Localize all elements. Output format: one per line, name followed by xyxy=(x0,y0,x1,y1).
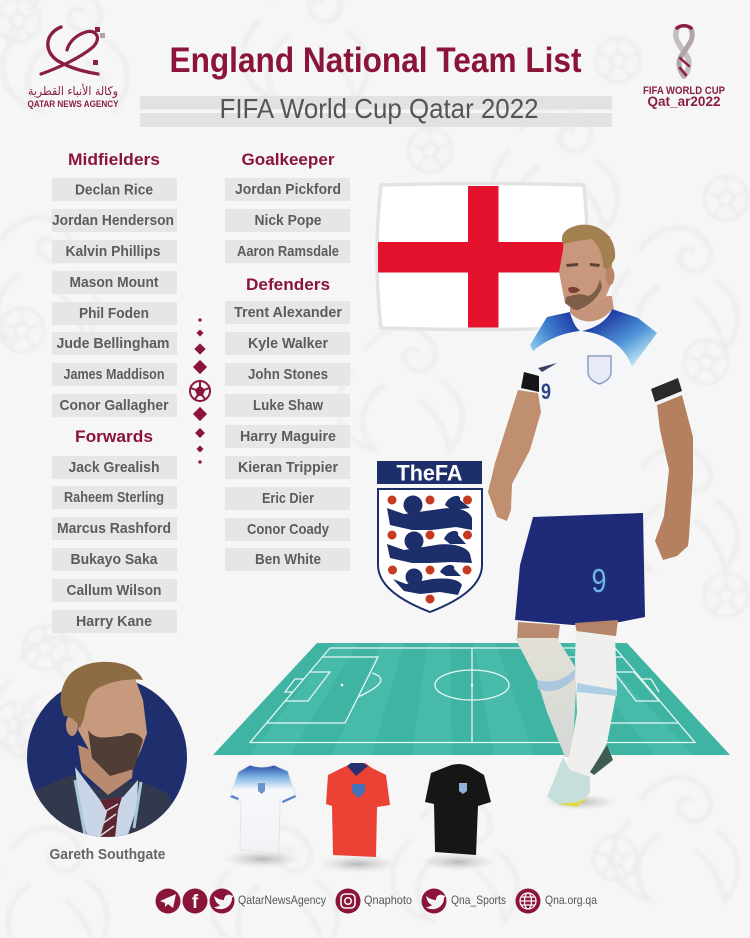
player: Harry Kane: Harry Kane xyxy=(76,613,152,630)
handle: Qna.org.qa: Qna.org.qa xyxy=(545,893,597,907)
icon: globe xyxy=(516,888,540,914)
heading: Defenders: Defenders xyxy=(246,275,330,294)
player: Phil Foden: Phil Foden xyxy=(79,305,149,322)
player: Bukayo Saka xyxy=(52,548,177,571)
player: Kalvin Phillips xyxy=(52,240,177,263)
neck xyxy=(570,296,614,332)
head and hair xyxy=(559,225,615,311)
face xyxy=(78,678,147,775)
logo: Qatar News Agency xyxy=(28,27,119,110)
handle: QatarNewsAgency: QatarNewsAgency xyxy=(238,893,326,907)
hair xyxy=(61,662,143,728)
coach name: Gareth Southgate xyxy=(50,846,166,863)
boot sole xyxy=(557,798,588,807)
right sock xyxy=(567,631,617,777)
icon: twitter xyxy=(422,888,446,914)
pitch xyxy=(213,643,730,755)
Qatar2022 wordmark: Qat_ar2022 xyxy=(648,94,720,109)
front boot xyxy=(547,757,590,807)
coach photo: Gareth Southgate xyxy=(20,662,190,838)
player: Marcus Rashford: Marcus Rashford xyxy=(57,520,171,537)
player: Kyle Walker xyxy=(225,332,350,355)
title: England National Team List xyxy=(170,41,582,80)
handle: Qna_Sports: Qna_Sports xyxy=(451,893,506,907)
panel: goalkeepers and defenders list xyxy=(225,150,350,571)
player: Callum Wilson xyxy=(52,579,177,602)
player: Jordan Henderson: Jordan Henderson xyxy=(52,212,174,229)
shirt crest xyxy=(588,356,611,384)
icon: twitter xyxy=(210,888,234,914)
panel: midfielders and forwards list xyxy=(52,150,177,633)
player: Kalvin Phillips: Kalvin Phillips xyxy=(66,243,160,260)
ear xyxy=(66,714,78,736)
shorts number: 9 xyxy=(592,562,606,599)
kit: home white shirt xyxy=(222,765,302,868)
player: Kieran Trippier xyxy=(225,456,350,479)
left sock xyxy=(515,638,577,757)
heading: Midfielders: Midfielders xyxy=(68,150,160,169)
captain armband xyxy=(651,378,682,402)
three lions xyxy=(387,496,472,595)
suit and shirt xyxy=(34,767,172,837)
navy circle xyxy=(27,677,187,837)
icon: England flag xyxy=(377,184,588,330)
right sock band xyxy=(577,683,617,696)
icon: QNA swirl xyxy=(41,27,105,74)
FA banner xyxy=(377,460,482,486)
icon: facebook xyxy=(182,888,208,914)
icon: instagram xyxy=(336,888,360,914)
player: Mason Mount: Mason Mount xyxy=(70,274,158,291)
icon: diamond and football divider xyxy=(190,318,210,464)
icon: The FA crest xyxy=(377,460,482,612)
icon: FIFA emblem xyxy=(676,26,692,76)
player: Callum Wilson: Callum Wilson xyxy=(66,582,162,599)
player: Aaron Ramsdale xyxy=(225,240,350,263)
icon: facebook: f xyxy=(192,892,199,913)
player: Trent Alexander xyxy=(225,301,350,324)
player: Conor Gallagher xyxy=(52,394,177,417)
back boot xyxy=(590,745,613,775)
subtitle: FIFA World Cup Qatar 2022 xyxy=(220,93,538,124)
QNA english name: QATAR NEWS AGENCY xyxy=(28,99,119,110)
player: Eric Dier xyxy=(225,487,350,510)
player: Kyle Walker: Kyle Walker xyxy=(248,335,328,352)
right blue shoulder xyxy=(582,309,657,367)
player: Declan Rice: Declan Rice xyxy=(75,182,153,198)
FA banner: TheFA xyxy=(396,460,463,486)
player: James Maddison: James Maddison xyxy=(64,366,164,383)
heading: Goalkeeper: Goalkeeper xyxy=(242,150,335,169)
player: Conor Coady xyxy=(225,518,350,541)
QNA arabic name: وكالة الأنباء القطرية xyxy=(28,83,118,99)
player: Mason Mount xyxy=(52,271,177,294)
player: Marcus Rashford xyxy=(52,517,177,540)
left sock band xyxy=(537,668,576,691)
handle: Qnaphoto: Qnaphoto xyxy=(364,893,412,907)
player: John Stones xyxy=(225,363,350,386)
player: Eric Dier: Eric Dier xyxy=(262,490,314,507)
player: Jack Grealish: Jack Grealish xyxy=(68,459,160,476)
player: Nick Pope xyxy=(225,209,350,232)
heading: Forwards: Forwards xyxy=(75,427,153,446)
player: Raheem Sterling xyxy=(52,486,177,509)
player: Ben White xyxy=(225,548,350,571)
player: John Stones: John Stones xyxy=(248,366,328,383)
player photo: Harry Kane xyxy=(488,225,693,810)
player: Jordan Pickford xyxy=(225,178,350,201)
black armband xyxy=(521,372,539,392)
roses xyxy=(388,496,472,604)
Nike swoosh xyxy=(538,363,557,372)
player: Bukayo Saka: Bukayo Saka xyxy=(70,551,158,568)
left arm xyxy=(488,390,541,521)
player: Phil Foden xyxy=(52,302,177,325)
player: Jordan Pickford: Jordan Pickford xyxy=(235,181,341,198)
kit: black goalkeeper shirt xyxy=(420,764,496,871)
beard xyxy=(88,730,143,776)
player: Raheem Sterling: Raheem Sterling xyxy=(64,489,164,506)
neck xyxy=(78,745,133,795)
player: Ben White: Ben White xyxy=(255,551,321,568)
right arm xyxy=(655,395,693,560)
player: Harry Maguire xyxy=(225,425,350,448)
white England shirt xyxy=(521,309,682,518)
shirt number: 9 xyxy=(541,379,551,404)
logo: FIFA World Cup Qatar 2022 xyxy=(643,26,725,109)
footer social links xyxy=(156,888,597,914)
player: Harry Maguire: Harry Maguire xyxy=(240,428,336,445)
FIFA wordmark: FIFA WORLD CUP xyxy=(643,85,725,97)
player: Trent Alexander: Trent Alexander xyxy=(234,304,342,321)
player: Jude Bellingham: Jude Bellingham xyxy=(56,335,170,352)
icon: telegram xyxy=(156,888,180,914)
FA shield xyxy=(378,489,482,612)
player: Conor Coady: Conor Coady xyxy=(247,521,330,538)
player: Jack Grealish xyxy=(52,456,177,479)
kit: away red shirt xyxy=(318,763,398,873)
subtitle xyxy=(140,93,612,127)
player: Conor Gallagher: Conor Gallagher xyxy=(60,397,169,414)
blue shirt shoulders xyxy=(530,312,580,351)
player: Declan Rice xyxy=(52,178,177,201)
player: Aaron Ramsdale: Aaron Ramsdale xyxy=(237,243,339,260)
player: Kieran Trippier: Kieran Trippier xyxy=(238,459,338,476)
right knee xyxy=(575,620,618,636)
player: James Maddison xyxy=(52,363,177,386)
player: Luke Shaw: Luke Shaw xyxy=(253,397,323,414)
navy shorts xyxy=(515,513,645,625)
player: Nick Pope: Nick Pope xyxy=(254,212,322,229)
left knee xyxy=(517,622,560,640)
boot shadow xyxy=(542,794,618,810)
player: Luke Shaw xyxy=(225,394,350,417)
player: Harry Kane xyxy=(52,610,177,633)
